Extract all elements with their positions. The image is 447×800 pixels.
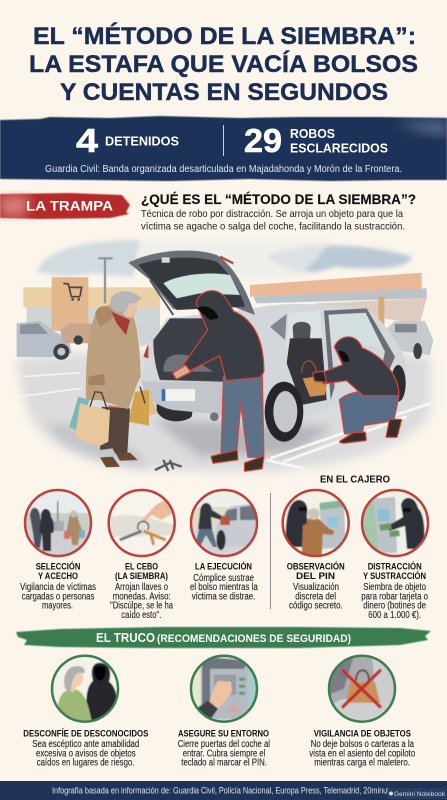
tip text: entrar. Cubra siempre el — [183, 748, 265, 759]
icon: thief taking money from ATM — [361, 489, 429, 557]
step 2: bait — [108, 489, 176, 621]
label: la trampa — [0, 193, 130, 219]
step text: SELECCIÓN — [36, 560, 81, 572]
icon: hand covering ATM keypad — [190, 655, 258, 723]
main illustration: parking lot scene — [17, 240, 433, 472]
title — [29, 22, 418, 106]
tip text: No deje bolsos o carteras a la — [311, 739, 414, 750]
left building — [23, 277, 160, 331]
step text: (LA SIEMBRA) — [115, 571, 168, 582]
step text — [110, 561, 173, 621]
step text: para robar tarjeta o — [361, 592, 428, 603]
icon: thief watching victim at ATM — [282, 489, 350, 557]
tip text: vista en el asiento del copiloto — [309, 748, 416, 759]
title: EL “MÉTODO DE LA SIEMBRA”: — [33, 22, 416, 50]
tip text: Sea escéptico ante amabilidad — [32, 739, 139, 750]
step text: Visualización — [293, 582, 339, 593]
tip 2: secure surroundings — [178, 655, 270, 769]
tip text: mientras carga el maletero. — [314, 758, 410, 769]
title: LA ESTAFA QUE VACÍA BOLSOS — [29, 50, 418, 78]
icon: two thieves watching a shopper — [24, 489, 92, 559]
step text: víctima se distrae. — [192, 592, 255, 602]
footer — [0, 781, 447, 800]
tip text: DESCONFÍE DE DESCONOCIDOS — [23, 728, 148, 739]
stat: robos esclarecidos: ROBOS — [290, 127, 335, 141]
label: el truco — [16, 627, 431, 648]
step text: mayores. — [42, 600, 73, 612]
stat: robos esclarecidos: 29 — [244, 122, 282, 159]
step text: caído esto". — [121, 610, 161, 621]
label: el truco: (RECOMENDACIONES DE SEGURIDAD) — [157, 633, 351, 645]
boot interior — [153, 318, 230, 382]
title: Y CUENTAS EN SEGUNDOS — [60, 79, 388, 106]
step text: "Discúlpe, se le ha — [110, 600, 173, 612]
heading and definition: Técnica de robo por distracción. Se arroja un objeto para que la — [141, 209, 403, 220]
woman with shopping bags — [69, 291, 157, 467]
step 4: pin observation — [282, 489, 350, 612]
step text: Y ACECHO — [38, 571, 78, 582]
icon: crossed-out bag on car seat — [328, 655, 396, 723]
stat: robos esclarecidos: ESCLARECIDOS — [290, 142, 388, 156]
thief with red outline, standing — [173, 291, 263, 471]
step text: DISTRACCIÓN — [368, 560, 422, 572]
stat: robos esclarecidos — [244, 122, 388, 159]
step text: cargadas o personas — [22, 592, 94, 603]
step text: DEL PIN — [296, 571, 335, 582]
step text: el bolso mientras la — [190, 582, 258, 593]
ground — [17, 350, 430, 472]
tip text: teclado al marcar el PIN. — [181, 758, 267, 769]
step 1: selection — [20, 489, 96, 612]
parked cars — [17, 321, 433, 360]
icon: thief taking bag from car — [190, 489, 258, 559]
watermark: Gemini Notebook — [394, 791, 446, 798]
banner subtitle: Guardia Civil: Banda organizada desarticulada en Majadahonda y Morón de la Frontera. — [45, 164, 402, 175]
side windows — [270, 314, 287, 340]
step text: Vigilancia de víctimas — [20, 582, 96, 593]
heading and definition — [141, 191, 416, 232]
step text: EL CEBO — [125, 561, 158, 572]
tip text — [309, 728, 416, 769]
step 3: execution — [190, 489, 258, 602]
heading and definition: víctima se agache o salga del coche, facilitando la sustracción. — [141, 222, 405, 232]
tip text: excesiva o avisos de objetos — [36, 748, 136, 759]
step text: OBSERVACIÓN — [287, 560, 345, 572]
right building — [250, 273, 427, 327]
heading: en el cajero: EN EL CAJERO — [320, 474, 390, 486]
label: la trampa: LA TRAMPA — [26, 198, 113, 214]
label: el truco: EL TRUCO — [96, 631, 155, 645]
tip text: VIGILANCIA DE OBJETOS — [314, 728, 411, 739]
step text — [287, 560, 345, 612]
icon: woman and hooded stranger — [51, 655, 119, 723]
step text: Arrojan llaves o — [115, 582, 168, 593]
step text: discreta del — [295, 592, 336, 603]
thief with red outline, crouching — [313, 337, 401, 443]
step text: monedas. Aviso: — [113, 592, 171, 603]
tip text: ASEGURE SU ENTORNO — [178, 728, 269, 739]
step 5: distraction at ATM — [361, 489, 429, 621]
step text: Siembra de objeto — [363, 582, 426, 593]
stats banner — [0, 116, 447, 181]
step text — [361, 560, 428, 621]
main car — [128, 250, 407, 442]
sky and clouds — [37, 240, 412, 280]
step text — [190, 560, 258, 602]
tip text — [23, 728, 148, 769]
stat: detenidos: 4 — [76, 122, 99, 159]
stat: detenidos — [76, 122, 179, 159]
step text: 600 a 1.000 €). — [368, 610, 421, 621]
step text — [20, 560, 96, 612]
watermark — [388, 788, 447, 799]
stolen bag — [302, 361, 328, 397]
lamp post — [98, 258, 113, 303]
step text: dinero (botines de — [363, 600, 426, 612]
stat: detenidos: DETENIDOS — [105, 134, 179, 148]
heading and definition: ¿QUÉ ES EL “MÉTODO DE LA SIEMBRA”? — [141, 191, 416, 207]
step text: LA EJECUCIÓN — [195, 560, 252, 572]
tip 1: distrust strangers — [23, 655, 148, 769]
car body — [142, 304, 407, 420]
step text: Y SUSTRACCIÓN — [363, 570, 426, 582]
step text: Cómplice sustrae — [193, 573, 254, 584]
dropped keys — [155, 460, 182, 471]
tip text — [178, 728, 270, 769]
wheels — [265, 382, 303, 442]
step text: código secreto. — [289, 600, 343, 612]
tip 3: watch belongings — [309, 655, 416, 769]
tip text: Cierre puertas del coche al — [178, 739, 270, 750]
tip text: caídos en lugares de riesgo. — [37, 758, 134, 769]
open tailgate — [128, 250, 255, 315]
icon: hand pointing at keys — [108, 489, 176, 557]
